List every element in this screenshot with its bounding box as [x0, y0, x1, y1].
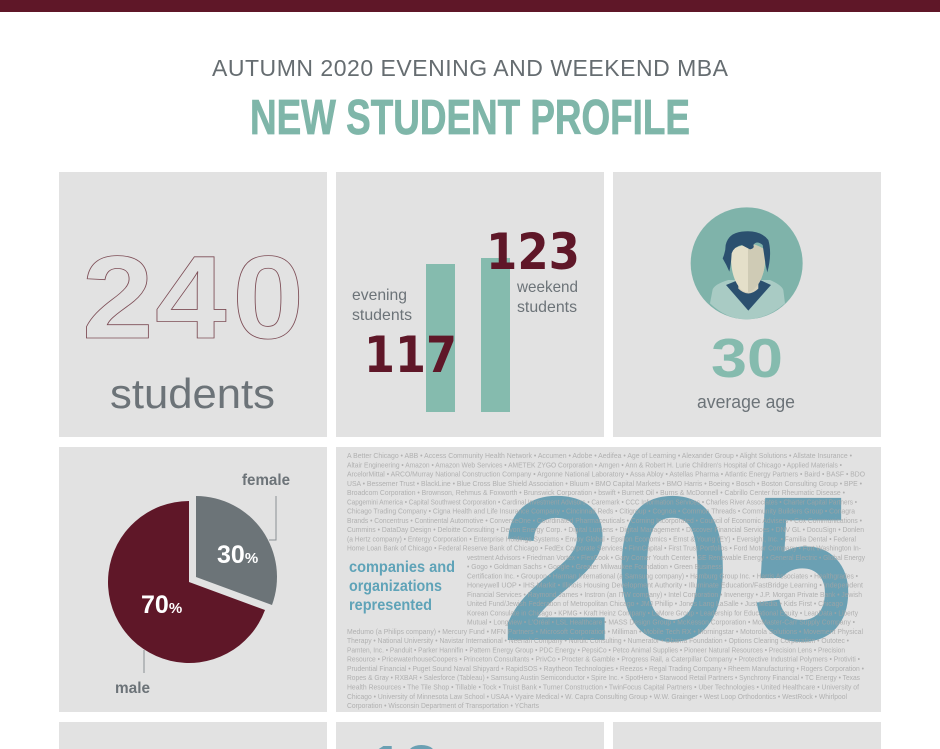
company list: Therapy • National University • Navistar International • Neenah Company • Nordic Consulting • Numerator • Obama Foundation • Options Clearing Corporation • Outotec •: [347, 636, 849, 645]
evening label: students: [352, 307, 412, 324]
company list: Cummins • DataDay Design • Deloitte Consulting • Devon Energy Corp. • Digital Lumens • Digital Management • Discover Financial Services • DNV GL • DocuSign • Donlen: [347, 525, 864, 534]
company list: Home Loan Bank of Chicago • Federal Reserve Bank of Chicago • FedEx Corporate Services • FinnCapital • First Trust Portfolios • Ford Motor Company • Fort Washington In-: [347, 544, 861, 553]
panel: gender split: [59, 447, 327, 712]
company list: Certification Inc. • Groupon • Harman International (a Samsung company) • Hamburg Group Inc. • Harris Associates • Healthgrades •: [467, 571, 858, 580]
male label: male: [115, 680, 150, 697]
company list: (a Hertz company) • Entergy Corporation • Enterprise Holdings Systems • Envoy Global • Epsilon Economics • Ernst & Young (EY) • Eversight, Inc. • Familia Dental • Federal: [347, 534, 856, 543]
company list: ArcelorMittal • ARCO/Murray National Construction Company • Argonne National Laboratory • Assa Abloy • Astellas Pharma • Atlantic Energy Partners • Baird • BASF • BDO: [347, 470, 865, 478]
pie slice: male: [108, 501, 265, 663]
company list: Altair Engineering • Amazon • Amazon Web Services • AMETEK ZYGO Corporation • Amgen • Ann & Robert H. Lurie Children's Hospital of Chicago • Applied Materials •: [347, 460, 842, 469]
panel: bottom left: [59, 722, 327, 749]
company list: [347, 451, 865, 710]
company list: vestment Advisors • Friedman Vortex • FlexCook • Gary Comer Youth Center • GE Renewable Energy • General Electric • Global Energy: [467, 553, 865, 562]
students label: students: [110, 370, 275, 417]
company list: Brands • Concentrus • Continental Automotive • ConverseOne • Coordinated Pharmaceuticals • Corning Incorporated • Council of Economic Advisers • Cox Communications •: [347, 516, 862, 525]
companies heading: organizations: [349, 578, 442, 595]
company list: Capgemini America • Capital Southwest Corporation • Cardinal Investment Advisors • Caremark • CCC Information Services • Charles River Associates • Charter Capital Partners •: [347, 497, 857, 506]
company list: A Better Chicago • ABB • Access Community Health Network • Accumen • Adobe • Aedifea • Age of Learning • Alexander Group • Alight Solutions • Allstate Insurance •: [347, 451, 852, 460]
company list: Pamten, Inc. • Panduit • Parker Hannifin • Pattern Energy Group • PDC Energy • PepsiCo • Petco Animal Supplies • Pioneer Natural Resources • Precision Lens • Precision: [347, 646, 845, 654]
age number: 30: [711, 327, 783, 389]
panel: companies represented: [336, 447, 881, 712]
female percentage: 30%: [217, 541, 258, 569]
company list: Health Resources • The Tile Shop • Tillable • Tock • Truist Bank • Turner Construction • TwinFocus Capital Partners • Uber Technologies • United Healthcare • University of: [347, 682, 860, 692]
panel: bottom middle: [336, 722, 604, 749]
male leader line: [143, 650, 145, 673]
evening label: evening: [352, 287, 407, 304]
company list: Ropes & Gray • RXBAR • Salesforce (Tableau) • Samsung Austin Semiconductor • Spire Inc. • SpotHero • Starwood Retail Partners • Synchrony Financial • TC Energy • Texas: [347, 673, 860, 682]
company list: Prudential Financial • Puget Sound Naval Shipyard • RapidSOS • Raytheon Technologies • Reezos • Regal Trading Company • Rheem Manufacturing • Rogers Corporation •: [347, 664, 864, 673]
panel: bottom right: [613, 722, 881, 749]
company list: Chicago • University of Minnesota Law School • USAA • Vyaire Medical • W. Capra Consulting Group • W.W. Grainger • West Loop Orthodontics • WestRock • Whirlpool: [347, 692, 847, 701]
weekend label: students: [517, 299, 577, 316]
large number 2005: 2: [502, 460, 610, 678]
panel: evening and weekend split: [336, 172, 604, 437]
top bar: [0, 0, 940, 12]
subtitle: AUTUMN 2020 EVENING AND WEEKEND MBA: [212, 55, 729, 81]
pie slice: female: [196, 496, 277, 605]
panel: average age: [613, 172, 881, 437]
male percentage: 70%: [141, 591, 182, 619]
weekend label: weekend: [516, 279, 578, 296]
company list: Korean Consulate in Chicago • KPMG • Kraft Heinz Company • LaMore Group • Leadership for Educational Equity • LeanData • Liberty: [467, 608, 858, 617]
company list: Resource • PricewaterhouseCoopers • Princeton Consultants • PrivCo • Procter & Gamble • Progress Rail, a Caterpillar Company • Protective Industrial Polymers • Protiviti •: [347, 655, 860, 664]
company list: Medumo (a Philips company) • Mercury Fund • MFN Partners • Microsoft Corporation • Milliman • Mobile Tech RX • Morningstar • Motorola Solutions • Movement Physical: [347, 627, 863, 636]
company list: Broadcom Corporation • Brownson, Rehmus & Foxworth • Brunswick Corporation • bswift • Burnett Oil • Burns & McDonnell • Cabrillo Center for Rheumatic Disease •: [347, 488, 845, 497]
company list: USA • Bessemer Trust • BlackLine • Blue Cross Blue Shield Association • Bluum • BMO Capital Markets • BMO Harris • Boeing • Bosch • Boston Consulting Group • BPE •: [347, 479, 862, 488]
panel: total students: [59, 172, 327, 437]
bar: weekend: [481, 258, 510, 412]
company list: Chicago Trading Company • Cigna Health and Life Insurance Company • Cincinnati Reds • Citigroup • Cognoa • Common Threads • Community Builders Group • Conagra: [347, 507, 856, 516]
title block: [212, 55, 729, 145]
average age label: average age: [697, 392, 795, 412]
companies heading: companies and: [349, 559, 455, 576]
company list: Honeywell UOP • IHS Markit • Illinois Housing Development Authority • Illuminate Education/FastBridge Learning • Independent: [467, 581, 863, 590]
company list: Corporation • Wisconsin Department of Transportation • YCharts: [347, 701, 539, 710]
female leader line: [269, 496, 276, 540]
bar: evening: [426, 264, 455, 412]
large number 2005: 5: [754, 460, 852, 678]
company list: Mutual • Longview • L'Oréal • LSL Healthcare • MASS Design Group • McKesson Corporation • McMaster-Carr Supply Company •: [467, 618, 855, 627]
weekend count: 123: [486, 223, 580, 281]
companies heading: represented: [349, 597, 432, 614]
icon: student avatar: [691, 207, 803, 319]
main heading: NEW STUDENT PROFILE: [250, 91, 690, 145]
company list: Financial Services • Raymond James • Instron (an ITW company) • Intel Corporation • Invenergy • J.P. Morgan Private Bank • Jewish: [467, 590, 862, 599]
large number 2005: [502, 460, 852, 678]
large number 2005: 0: [618, 460, 726, 678]
outlined number 240: 240: [82, 232, 304, 364]
company list: United Fund/Jewish Federation of Metropolitan Chicago • JMJ Phillip • Jones Lang LaSalle • Just Media • Kids First • Chicago: [467, 599, 843, 608]
evening count: 117: [364, 326, 457, 384]
female label: female: [242, 472, 290, 489]
company list: • Gogo • Goldman Sachs • Google • Greater Milwaukee Foundation • Green Business: [467, 562, 722, 571]
